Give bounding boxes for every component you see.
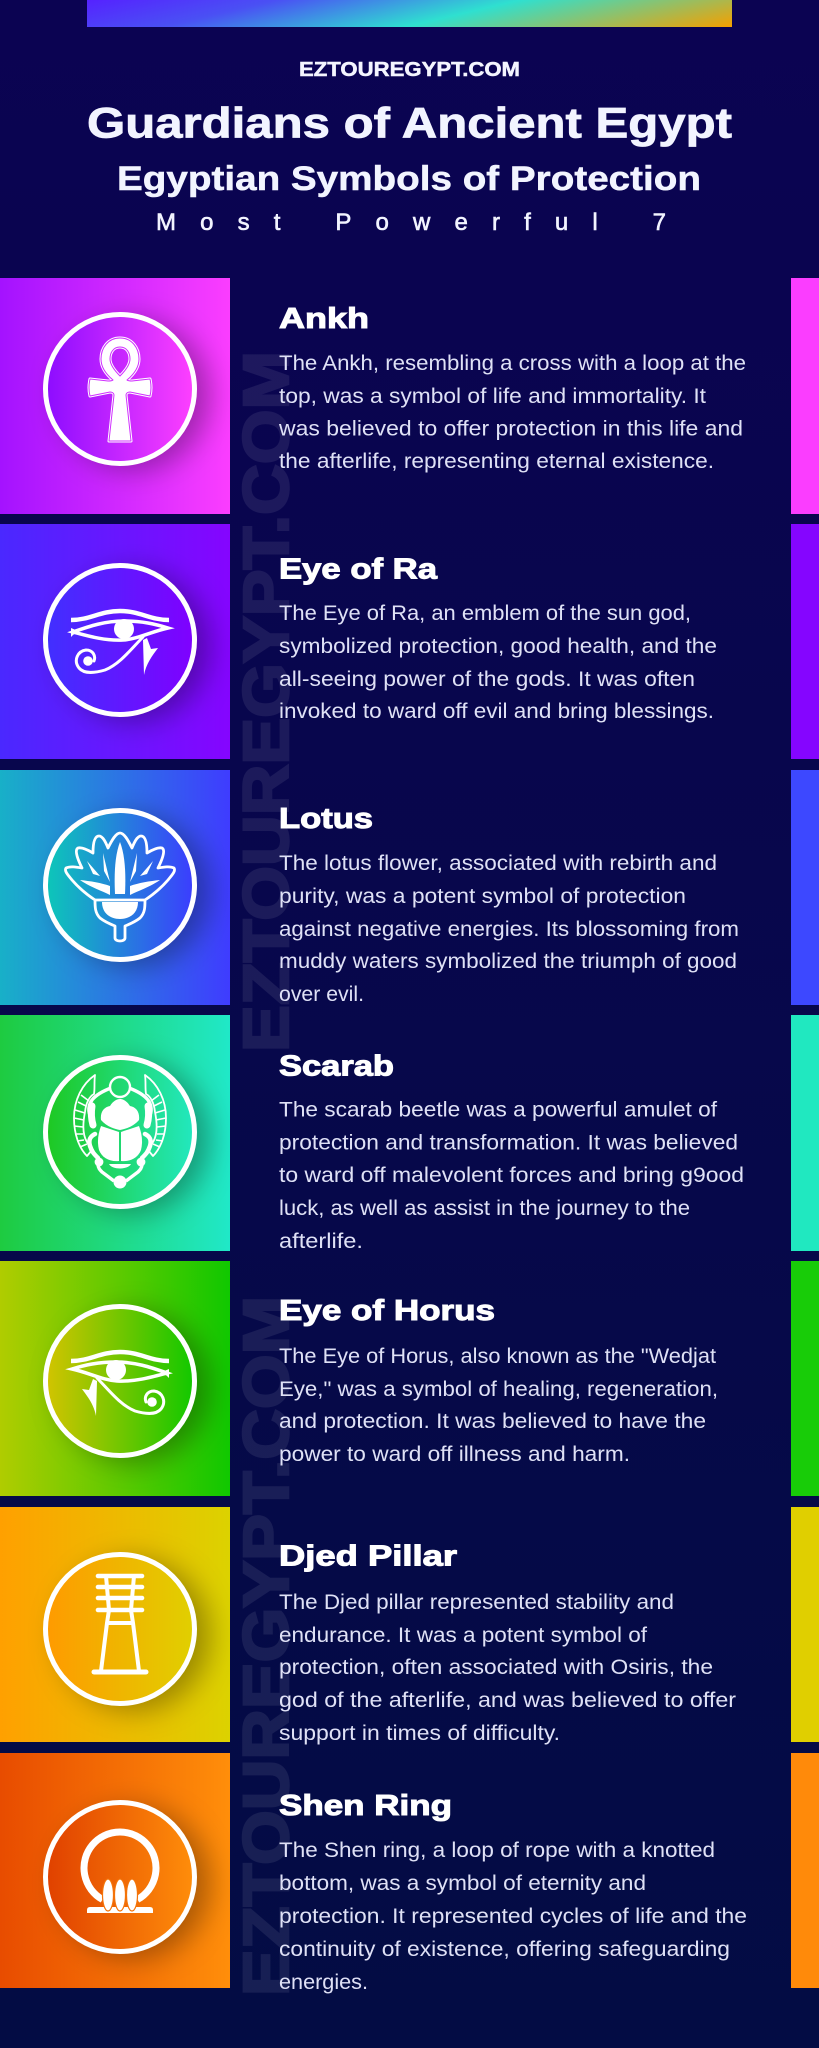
- description: power to ward off illness and harm.: [279, 1443, 630, 1466]
- top gradient bar: [87, 0, 732, 27]
- description: protection, often associated with Osiris, the: [279, 1656, 713, 1679]
- colour block: [0, 524, 230, 759]
- icon: lotus: [46, 810, 210, 967]
- right strip: [791, 278, 819, 514]
- description: was believed to offer protection in this life and: [278, 418, 743, 440]
- description: afterlife.: [279, 1230, 363, 1253]
- watermark lower: EZTOUREGYPT.COM: [230, 1296, 302, 1996]
- description: the afterlife, representing eternal existence.: [279, 450, 714, 473]
- icon: eye of ra: [46, 566, 210, 722]
- right strip: [791, 524, 819, 759]
- panel: Lotus: [0, 770, 819, 1006]
- tagline: Most Powerful 7: [156, 209, 666, 236]
- description: endurance. It was a potent symbol of: [279, 1624, 647, 1647]
- right strip: [791, 1015, 819, 1251]
- description: bottom, was a symbol of eternity and: [279, 1872, 646, 1895]
- colour block: [0, 278, 230, 514]
- description: to ward off malevolent forces and bring g9ood: [279, 1164, 744, 1187]
- description: luck, as well as assist in the journey to the: [279, 1197, 690, 1220]
- panel: Scarab: [0, 1015, 819, 1253]
- description: invoked to ward off evil and bring blessings.: [279, 700, 714, 723]
- panel: Ankh: [0, 278, 819, 514]
- description: [279, 602, 717, 723]
- colour block: [0, 1507, 230, 1742]
- description: [279, 1591, 736, 1745]
- heading: Eye of Ra: [279, 554, 438, 586]
- colour block: [0, 1261, 230, 1496]
- right strip: [791, 770, 819, 1005]
- right strip: [791, 1753, 819, 1988]
- description: [278, 352, 746, 473]
- subtitle: Egyptian Symbols of Protection: [117, 160, 701, 198]
- description: The Eye of Ra, an emblem of the sun god,: [279, 602, 691, 625]
- panel: Djed Pillar: [0, 1507, 819, 1745]
- description: protection. It represented cycles of life and the: [279, 1905, 747, 1928]
- icon: shen ring: [46, 1802, 210, 1959]
- icon: djed pillar: [46, 1554, 210, 1711]
- description: The Shen ring, a loop of rope with a knotted: [279, 1839, 715, 1862]
- description: The lotus flower, associated with rebirth and: [279, 852, 717, 875]
- description: top, was a symbol of life and immortality. It: [279, 385, 706, 408]
- description: continuity of existence, offering safeguarding: [279, 1938, 730, 1961]
- panel: Eye of Ra: [0, 524, 819, 759]
- description: energies.: [279, 1971, 368, 1994]
- heading: Ankh: [279, 303, 369, 335]
- description: [279, 1098, 744, 1253]
- right strip: [791, 1507, 819, 1742]
- description: The Ankh, resembling a cross with a loop at the: [279, 352, 746, 375]
- panel: Shen Ring: [0, 1753, 819, 1994]
- colour block: [0, 770, 230, 1005]
- description: support in times of difficulty.: [279, 1722, 560, 1745]
- heading: Eye of Horus: [279, 1295, 495, 1327]
- title: Guardians of Ancient Egypt: [87, 100, 732, 148]
- description: purity, was a potent symbol of protection: [279, 885, 686, 908]
- icon: eye of horus: [46, 1306, 210, 1463]
- description: Eye," was a symbol of healing, regeneration,: [279, 1378, 718, 1401]
- description: [279, 1345, 718, 1466]
- description: [279, 1839, 747, 1994]
- heading: Shen Ring: [279, 1790, 452, 1822]
- description: protection and transformation. It was believed: [279, 1132, 738, 1154]
- description: over evil.: [279, 983, 364, 1006]
- heading: Scarab: [279, 1050, 394, 1082]
- description: [279, 852, 739, 1006]
- description: symbolized protection, good health, and the: [279, 635, 717, 658]
- description: The scarab beetle was a powerful amulet of: [279, 1098, 717, 1122]
- heading: Djed Pillar: [279, 1540, 457, 1572]
- description: god of the afterlife, and was believed to offer: [279, 1689, 736, 1712]
- icon: scarab: [46, 1058, 210, 1214]
- colour block: [0, 1753, 230, 1988]
- panel: Eye of Horus: [0, 1261, 819, 1496]
- icon: ankh: [46, 314, 210, 471]
- description: The Djed pillar represented stability and: [279, 1591, 674, 1614]
- watermark upper: EZTOUREGYPT.COM: [230, 351, 302, 1052]
- description: against negative energies. Its blossoming from: [279, 918, 739, 941]
- description: muddy waters symbolized the triumph of good: [279, 950, 737, 973]
- heading: Lotus: [279, 803, 373, 835]
- right strip: [791, 1261, 819, 1496]
- description: and protection. It was believed to have the: [279, 1410, 706, 1433]
- site name: EZTOUREGYPT.COM: [299, 59, 520, 81]
- description: The Eye of Horus, also known as the "Wedjat: [279, 1345, 716, 1368]
- description: all-seeing power of the gods. It was often: [279, 668, 695, 691]
- colour block: [0, 1015, 230, 1251]
